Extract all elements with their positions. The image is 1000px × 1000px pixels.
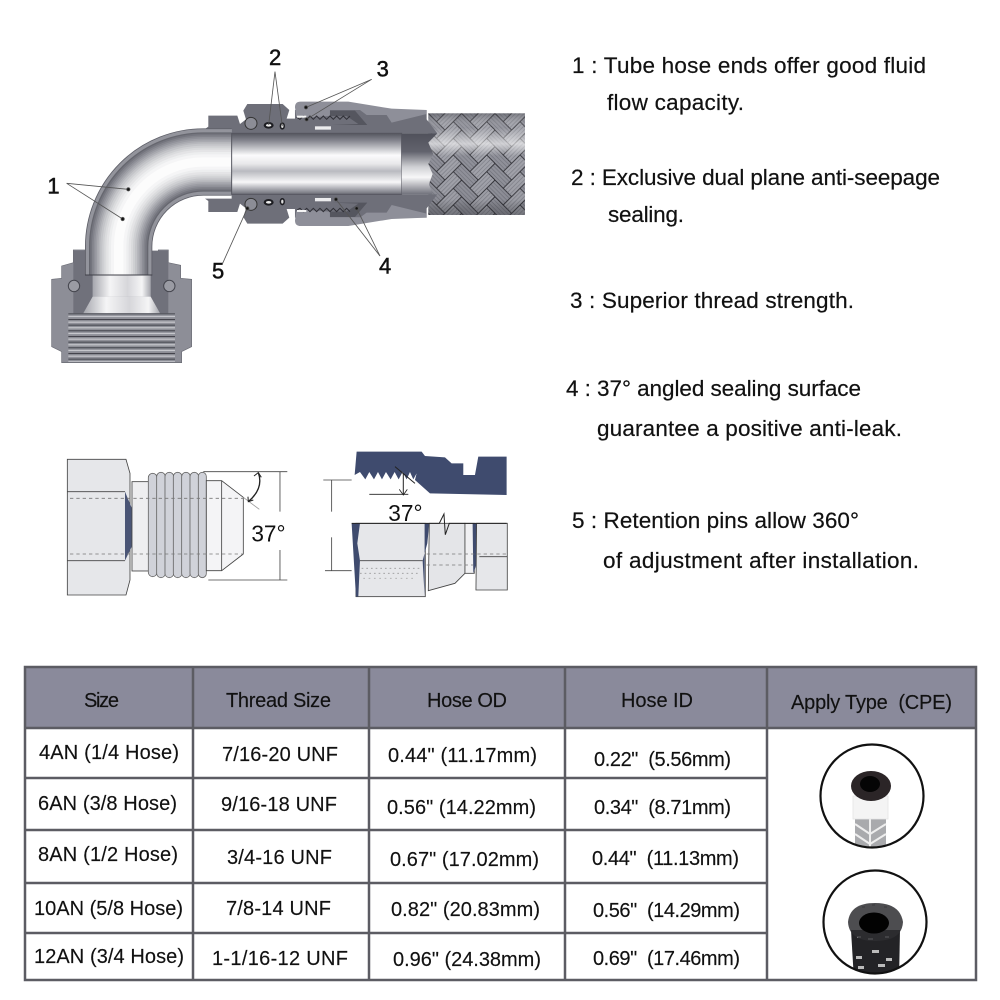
column: hose ID values: 0.56" (14.29mm) <box>593 900 740 922</box>
icon: black nylon braided hose in circle <box>824 870 926 980</box>
fitting body <box>205 102 437 226</box>
text block: feature 4 <box>566 376 902 441</box>
callout numbers: 3 <box>377 57 389 82</box>
column: size values: 4AN (1/4 Hose) <box>39 742 179 764</box>
centre dashes and nose line <box>70 481 243 571</box>
column: thread size values: 7/8-14 UNF <box>226 898 331 920</box>
column: hose ID values <box>592 749 740 970</box>
column: hose ID values: 0.44" (11.13mm) <box>592 848 739 870</box>
text block: feature 3: 3 : Superior thread strength. <box>570 288 854 313</box>
male hex body <box>67 459 150 595</box>
table column headings: Size <box>84 690 119 712</box>
column: hose ID values: 0.69" (17.46mm) <box>593 948 740 970</box>
table column headings: Apply Type (CPE) <box>791 692 952 714</box>
column: thread size values: 7/16-20 UNF <box>222 744 338 766</box>
elbow tube <box>85 162 232 275</box>
column: size values <box>34 742 184 968</box>
flare nose <box>206 481 243 571</box>
callout numbers: 2 <box>269 45 281 70</box>
leader lines <box>67 72 380 263</box>
braided hose <box>428 113 525 215</box>
text block: feature 1: 1 : Tube hose ends offer good fluid <box>572 53 926 78</box>
column: thread size values: 1-1/16-12 UNF <box>212 948 348 970</box>
column: thread size values <box>212 744 348 970</box>
table: hose size specifications <box>25 667 976 980</box>
column: hose OD values: 0.96" (24.38mm) <box>393 949 541 971</box>
callout numbers: 5 <box>212 258 224 283</box>
text block: feature 5: of adjustment after installation. <box>603 548 919 573</box>
column: size values: 12AN (3/4 Hose) <box>34 946 184 968</box>
column: size values: 8AN (1/2 Hose) <box>38 844 178 866</box>
text block: feature 5 <box>572 508 919 573</box>
text block: feature 4: 4 : 37° angled sealing surface <box>566 376 861 401</box>
text block: feature 4: guarantee a positive anti-leak. <box>597 416 902 441</box>
section break line <box>352 514 507 535</box>
column: hose ID values: 0.22" (5.56mm) <box>594 749 731 771</box>
text block: feature 2: 2 : Exclusive dual plane anti-seepage <box>571 165 940 190</box>
table header band <box>25 667 976 728</box>
swivel nut and threads <box>52 250 192 363</box>
male dimension lines <box>203 472 287 580</box>
table column headings <box>84 690 952 714</box>
diagram: male 37 degree flare fitting <box>67 459 287 595</box>
column: thread size values: 9/16-18 UNF <box>221 794 337 816</box>
female dimension lines <box>323 467 415 571</box>
column: hose OD values: 0.56" (14.22mm) <box>387 797 536 819</box>
column: hose ID values: 0.34" (8.71mm) <box>594 797 731 819</box>
column: size values: 10AN (5/8 Hose) <box>34 898 183 920</box>
text block: feature 1 <box>572 53 926 115</box>
column: thread size values: 3/4-16 UNF <box>227 847 332 869</box>
icon: white PTFE braided hose in circle <box>820 744 924 850</box>
text block: feature 2 <box>571 165 940 227</box>
diagram: female 37 degree swivel section <box>323 452 507 597</box>
column: hose OD values: 0.44" (11.17mm) <box>388 745 537 767</box>
male thread ridges <box>148 472 206 578</box>
table column headings: Hose OD <box>427 690 507 712</box>
callout numbers <box>47 45 391 283</box>
male 37 degree label: 37° <box>251 521 286 547</box>
callout numbers: 1 <box>47 173 60 198</box>
text block: feature 5: 5 : Retention pins allow 360° <box>572 508 859 533</box>
straight tube <box>232 133 437 194</box>
female 37 degree label: 37° <box>388 500 423 526</box>
table column headings: Thread Size <box>226 690 331 712</box>
table column headings: Hose ID <box>621 690 693 712</box>
column: size values: 6AN (3/8 Hose) <box>38 793 177 815</box>
column: hose OD values: 0.82" (20.83mm) <box>391 899 540 921</box>
callout numbers: 4 <box>379 253 391 278</box>
column: hose OD values <box>387 745 541 971</box>
lower hex <box>352 523 507 597</box>
dark cut nut section <box>355 452 507 495</box>
table grid <box>25 667 976 980</box>
diagram: elbow hose fitting cutaway <box>47 45 525 363</box>
text block: feature 1: flow capacity. <box>607 90 744 115</box>
text block: feature 2: sealing. <box>608 202 684 227</box>
column: hose OD values: 0.67" (17.02mm) <box>390 849 539 871</box>
